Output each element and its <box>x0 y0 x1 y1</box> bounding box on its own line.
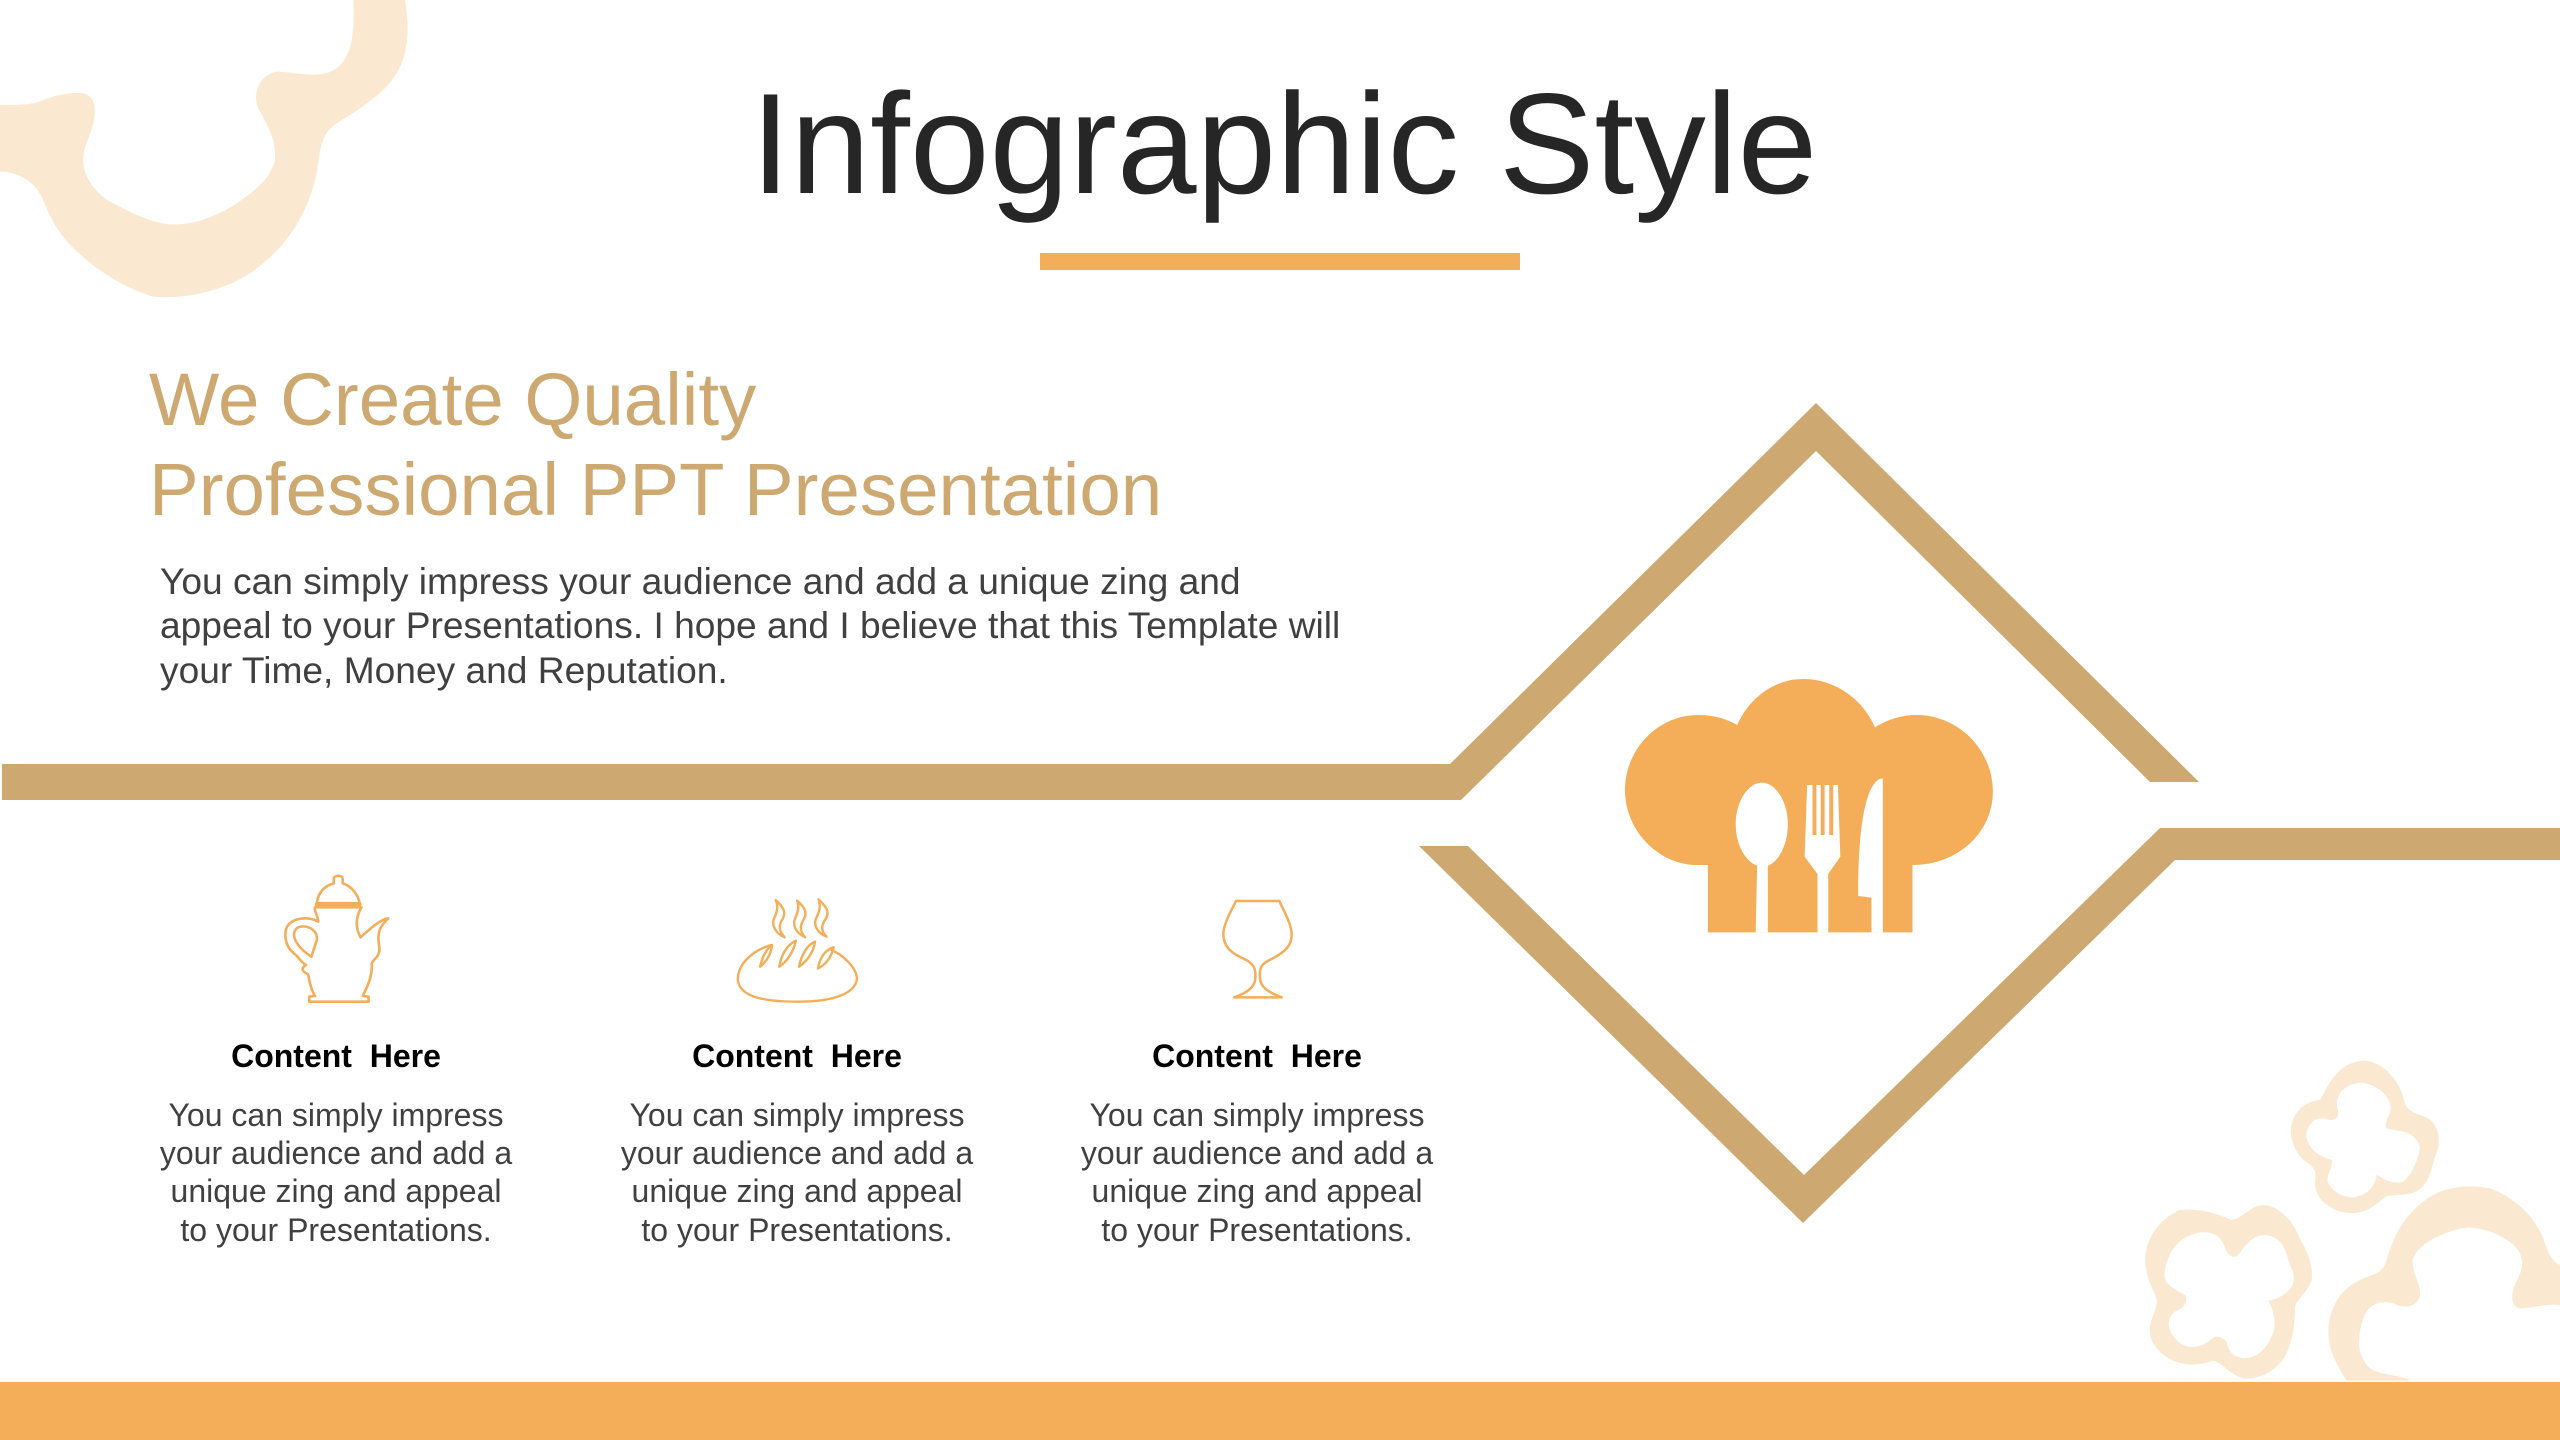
column 2 text: your audience and add a <box>621 1135 973 1171</box>
column 3 text: You can simply impress <box>1090 1096 1424 1132</box>
column 3 text <box>1081 1038 1434 1248</box>
heading <box>149 358 1162 530</box>
decoration: top-left pepper ring <box>0 0 408 297</box>
column 3 text: unique zing and appeal <box>1092 1173 1422 1209</box>
heading: Professional PPT Presentation <box>149 448 1162 530</box>
column 1 text: unique zing and appeal <box>171 1173 501 1209</box>
column 3 text: Content Here <box>1152 1038 1362 1074</box>
column 2 text: unique zing and appeal <box>632 1173 962 1209</box>
footer bar <box>0 1382 2560 1440</box>
title underline <box>1040 253 1520 270</box>
intro paragraph <box>160 560 1340 691</box>
icon: wine glass <box>1223 901 1292 997</box>
spoon cutout <box>1736 783 1788 932</box>
column 3 text: to your Presentations. <box>1101 1212 1413 1248</box>
column 2 text: to your Presentations. <box>641 1212 953 1248</box>
column 2 text: You can simply impress <box>630 1096 964 1132</box>
column 1 text: your audience and add a <box>160 1135 512 1171</box>
intro paragraph: appeal to your Presentations. I hope and I believe that this Template will <box>160 604 1340 646</box>
column 2 text: Content Here <box>692 1038 902 1074</box>
title: Infographic Style <box>751 64 1817 224</box>
icon: steaming bread <box>738 899 857 1002</box>
column 1 text: Content Here <box>231 1038 441 1074</box>
diamond frame: upper line from left bar <box>2 403 2199 800</box>
knife cutout <box>1858 778 1883 932</box>
icon: chef hat with cutlery <box>1625 679 1993 932</box>
icon: coffee pot <box>285 876 388 1002</box>
fork cutout <box>1805 785 1840 932</box>
column 1 text: You can simply impress <box>169 1096 503 1132</box>
column 2 text <box>621 1038 974 1248</box>
column 1 text: to your Presentations. <box>180 1212 492 1248</box>
decoration: bottom-right pepper rings <box>2145 1061 2560 1381</box>
intro paragraph: your Time, Money and Reputation. <box>160 649 728 691</box>
column 3 text: your audience and add a <box>1081 1135 1433 1171</box>
intro paragraph: You can simply impress your audience and add a unique zing and <box>160 560 1241 602</box>
heading: We Create Quality <box>149 358 756 440</box>
diamond frame: lower line to right bar <box>1419 828 2560 1223</box>
column 1 text <box>160 1038 512 1248</box>
